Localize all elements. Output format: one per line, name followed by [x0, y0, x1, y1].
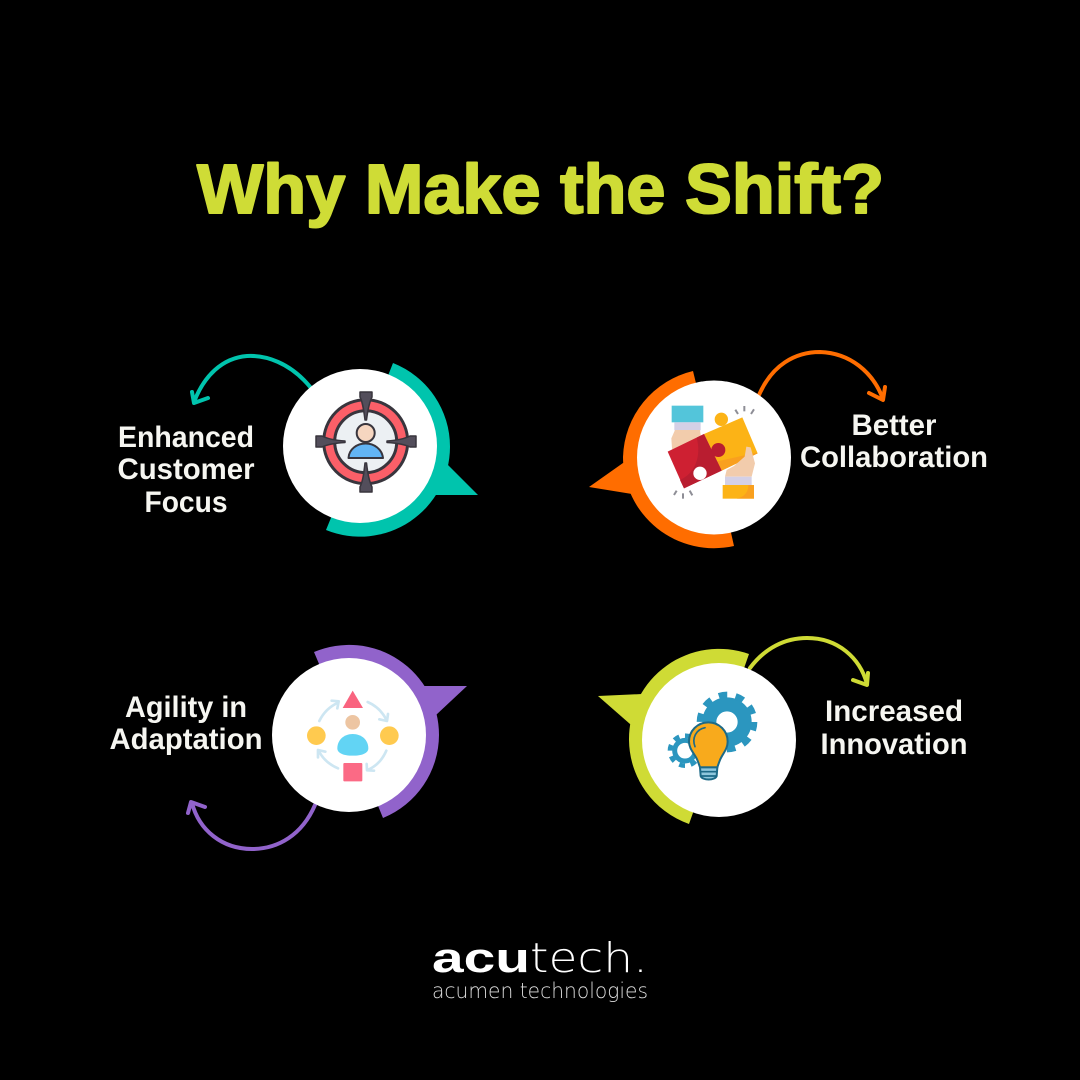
- label: better collaboration: [800, 409, 988, 474]
- panel: increased innovation: [598, 638, 968, 824]
- icon: customer target: [316, 392, 416, 492]
- logo wordmark: tech.: [530, 934, 648, 982]
- purple ring with pointer: [314, 645, 467, 818]
- icon: adaptation cycle: [307, 691, 399, 781]
- icon: puzzle hands: [668, 406, 758, 499]
- label: increased innovation: Innovation: [820, 728, 968, 761]
- teal ring with pointer: [326, 363, 478, 537]
- purple curved arrow: [188, 802, 315, 849]
- white circle: [637, 380, 791, 534]
- panel: enhanced customer focus: [118, 356, 478, 537]
- lime ring with pointer: [598, 649, 749, 824]
- label: enhanced customer focus: Customer: [118, 453, 255, 486]
- white circle: [283, 369, 437, 523]
- label: agility in adaptation: Adaptation: [110, 723, 262, 756]
- icon: gears and lightbulb: [670, 695, 754, 779]
- logo wordmark: acu: [432, 934, 530, 981]
- logo: acutech: [432, 934, 648, 1003]
- orange ring with pointer: [589, 371, 734, 548]
- white circle: [642, 663, 796, 817]
- label: better collaboration: Collaboration: [800, 441, 988, 474]
- teal curved arrow: [192, 356, 311, 403]
- label: increased innovation: [820, 695, 968, 761]
- white circle: [272, 658, 426, 812]
- orange curved arrow: [759, 352, 885, 400]
- panel: better collaboration: [589, 352, 988, 548]
- lime curved arrow: [750, 638, 868, 685]
- label: enhanced customer focus: [118, 421, 255, 519]
- label: enhanced customer focus: Enhanced: [118, 421, 254, 454]
- label: agility in adaptation: Agility in: [125, 691, 247, 724]
- label: agility in adaptation: [110, 691, 262, 756]
- logo tagline: acumen technologies: [432, 979, 648, 1003]
- label: better collaboration: Better: [852, 409, 937, 442]
- label: increased innovation: Increased: [825, 695, 963, 728]
- title: Why Make the Shift?: [197, 150, 884, 228]
- logo wordmark: [432, 934, 648, 982]
- label: enhanced customer focus: Focus: [144, 486, 228, 519]
- panel: agility in adaptation: [110, 645, 467, 849]
